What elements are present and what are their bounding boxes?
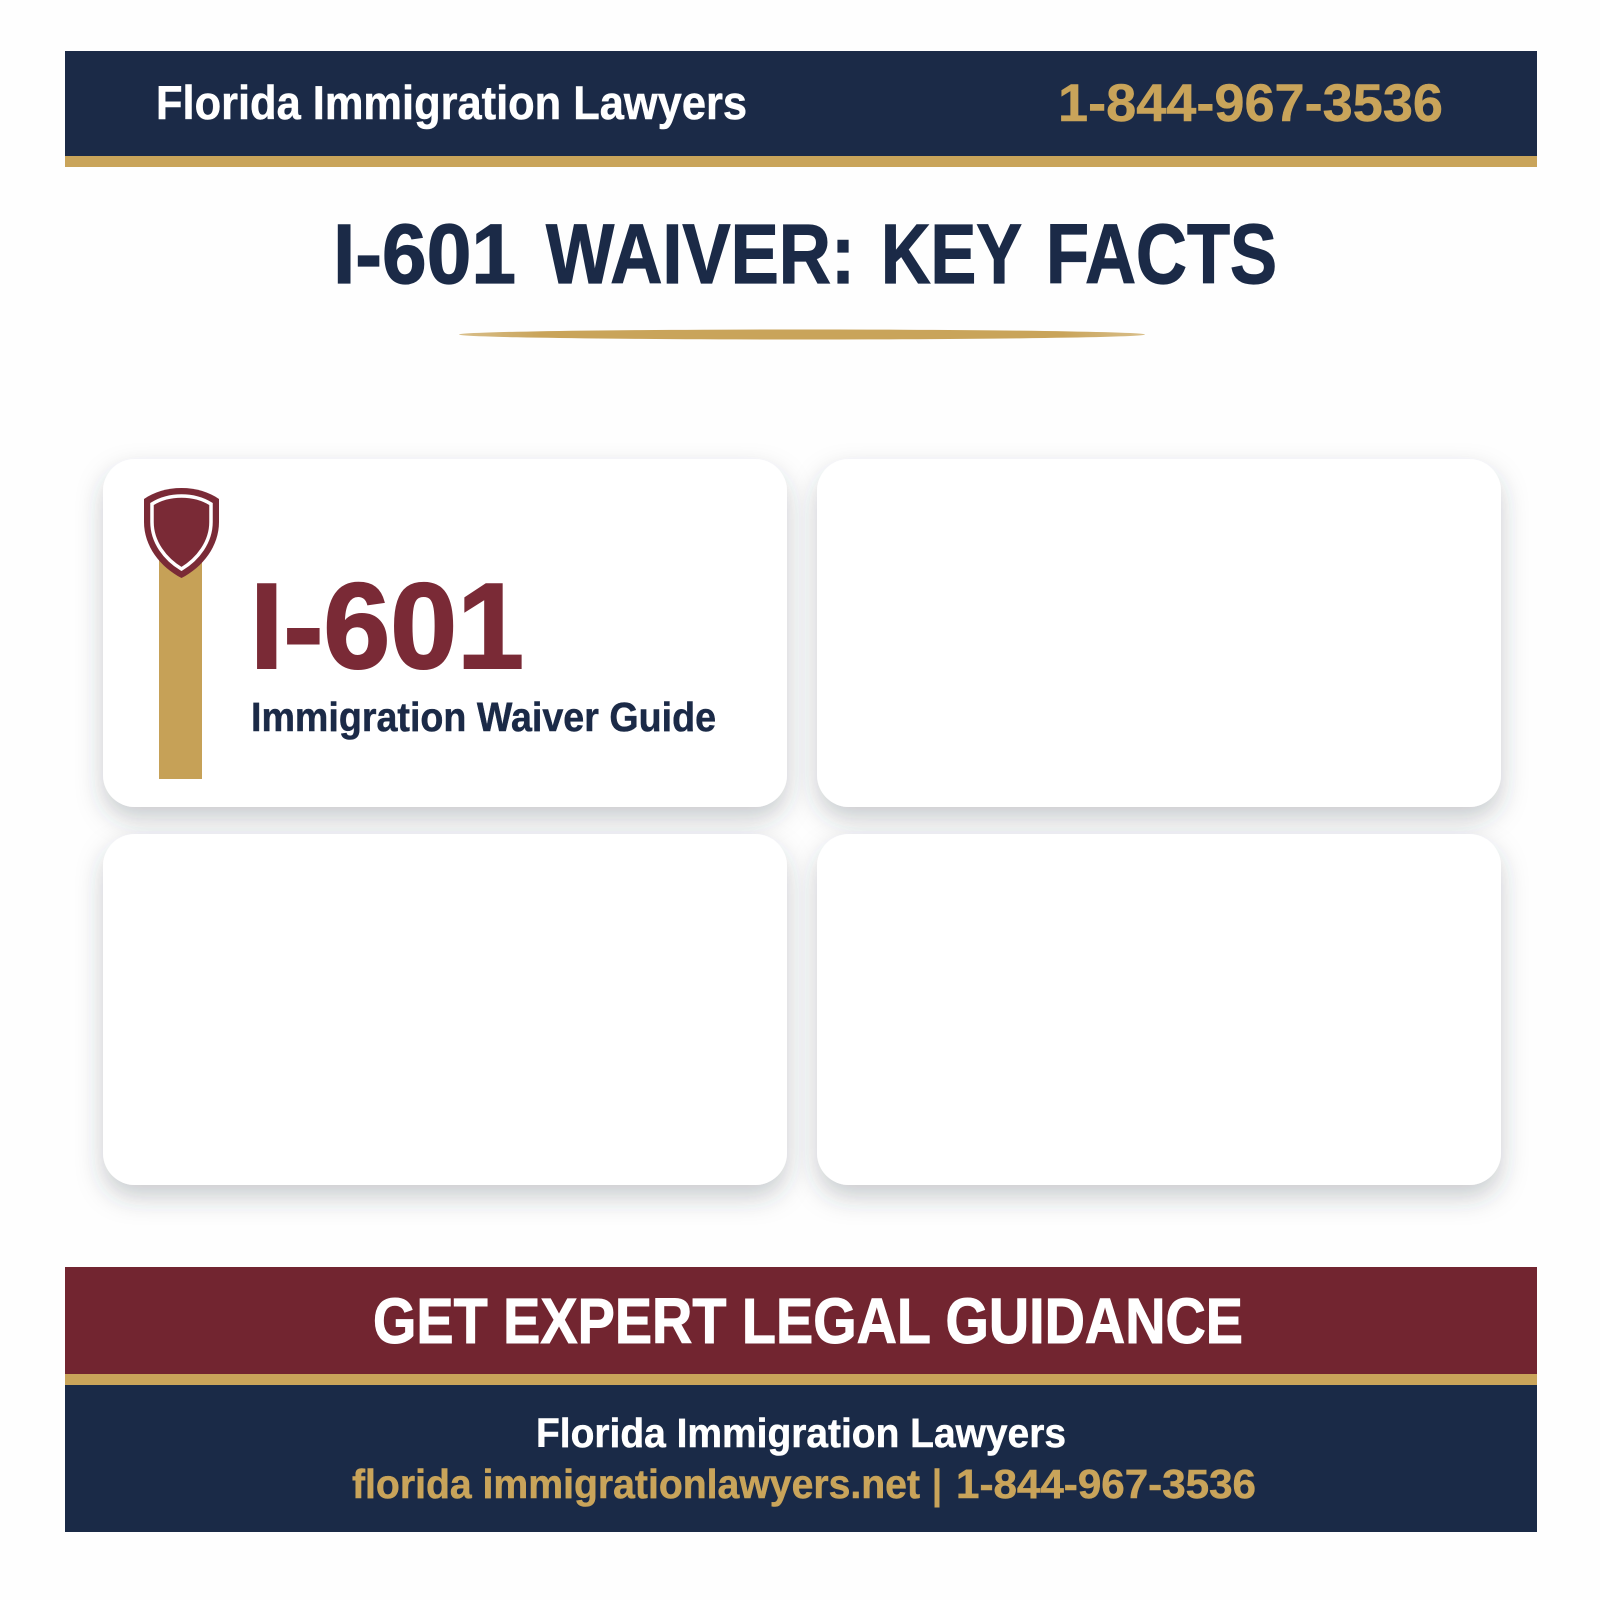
footer website and phone: florida immigrationlawyers.net [352,1461,920,1507]
header firm name: Florida Immigration Lawyers [156,76,747,129]
title underline [459,330,1145,340]
panel: empty card top right [817,459,1501,807]
panel: empty card bottom left [103,834,787,1185]
header phone number: 1-844-967-3536 [1058,74,1443,133]
title: I-601 [333,207,516,301]
footer website and phone [352,1461,1256,1507]
card number I-601: I-601 [250,558,524,694]
title: WAIVER: [546,207,855,301]
card subtitle: Immigration Waiver Guide [251,694,716,740]
footer website and phone: | [932,1461,942,1507]
gold divider band [65,1374,1537,1385]
title [333,207,1277,301]
panel: I-601 card [103,459,787,807]
title: FACTS [1046,207,1277,301]
footer firm name: Florida Immigration Lawyers [536,1410,1066,1456]
panel: empty card bottom right [817,834,1501,1185]
call to action text: GET EXPERT LEGAL GUIDANCE [373,1285,1243,1357]
footer website and phone: 1-844-967-3536 [956,1461,1256,1507]
footer panel [65,1385,1537,1532]
title: KEY [881,207,1022,301]
call to action banner [65,1267,1537,1374]
header banner [65,51,1537,167]
icon: shield [144,488,219,578]
gold vertical bar [159,560,202,779]
